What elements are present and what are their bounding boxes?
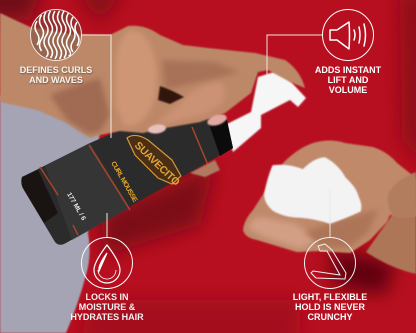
label: CRUNCHY	[308, 312, 352, 322]
photo: pump bottle	[21, 70, 306, 245]
label: HOLD IS NEVER	[295, 302, 366, 312]
foam	[265, 158, 361, 223]
label	[70, 292, 144, 322]
label: AND WAVES	[29, 75, 83, 85]
connector line	[82, 35, 111, 138]
label: HYDRATES HAIR	[70, 312, 144, 322]
icon: waves	[30, 10, 82, 60]
callout: defines curls and waves	[20, 10, 111, 138]
bottle emblem: SUAVECITO	[132, 140, 182, 188]
label: MOISTURE &	[79, 302, 136, 312]
label	[20, 65, 92, 85]
bottle volume text: 177 ML / 6	[65, 192, 87, 222]
callout: locks in moisture	[70, 213, 144, 322]
label stripes	[40, 127, 208, 235]
label: VOLUME	[329, 85, 367, 95]
connector line	[267, 35, 322, 75]
label: ADDS INSTANT	[315, 65, 382, 75]
icon: flexible comb	[304, 238, 356, 288]
thumb	[388, 172, 416, 218]
forearm	[366, 205, 416, 274]
bottle pump	[225, 70, 306, 152]
connector line	[329, 190, 331, 237]
label: DEFINES CURLS	[20, 65, 92, 75]
connector line	[106, 213, 108, 237]
bottle label text: CURL MOUSSE	[109, 160, 138, 204]
callout: adds instant lift and volume	[267, 10, 382, 95]
label	[293, 292, 367, 322]
photo: open palm with foam	[243, 140, 416, 274]
bottle body	[21, 118, 233, 245]
label	[315, 65, 382, 95]
photo: forearm and pumping hand	[0, 13, 305, 177]
callout: light flexible hold	[293, 190, 367, 322]
photo: grey backdrop	[0, 95, 100, 333]
label: LIFT AND	[328, 75, 369, 85]
icon: speaker	[322, 10, 374, 60]
label: LIGHT, FLEXIBLE	[293, 292, 367, 302]
icon: water drop	[82, 238, 132, 288]
palm	[243, 140, 416, 253]
label: LOCKS IN	[85, 292, 129, 302]
